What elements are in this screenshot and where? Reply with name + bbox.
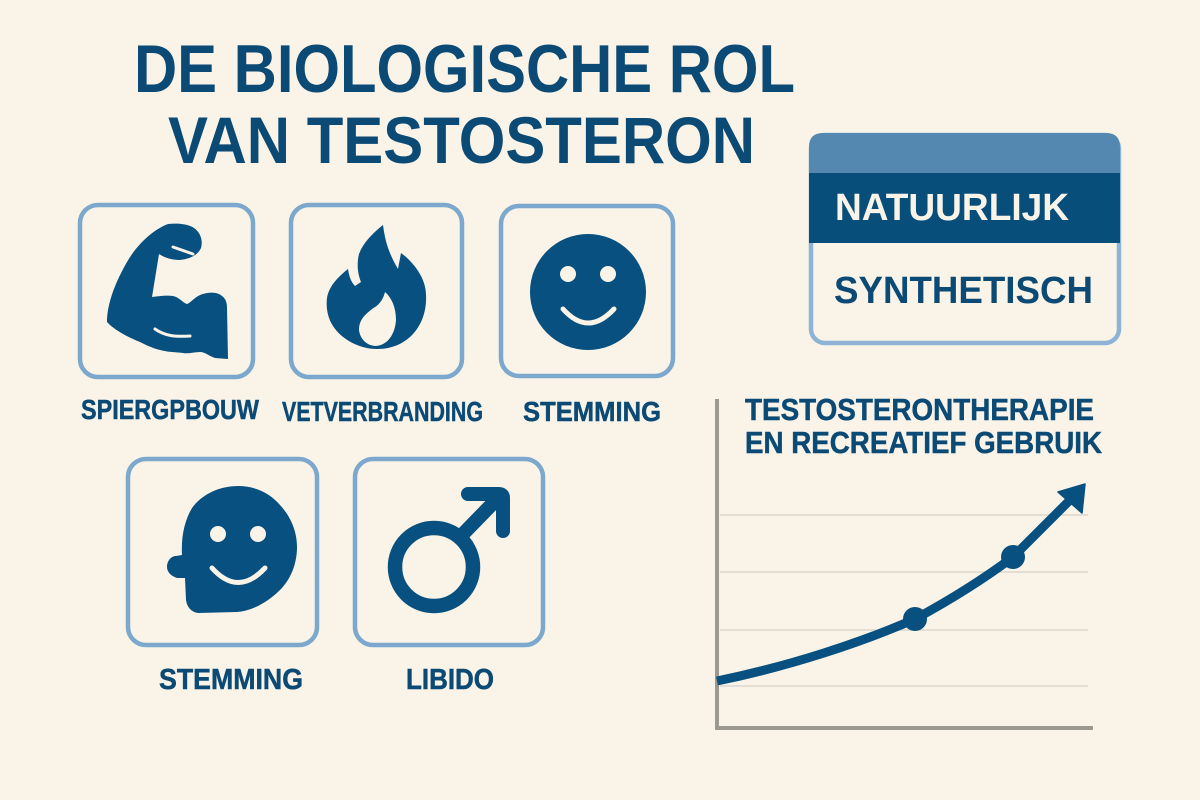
panel: line chart — [717, 392, 1103, 728]
icon: smiley — [530, 234, 646, 350]
icon frame: vetverbranding — [291, 205, 462, 377]
chart heading — [745, 392, 1103, 460]
panel: spieropbouw — [80, 205, 259, 425]
panel: vetverbranding — [282, 205, 483, 427]
panel: stemming 2 — [128, 459, 317, 696]
panel: stemming 1 — [501, 206, 673, 427]
chart heading: TESTOSTERONTHERAPIE — [745, 392, 1094, 427]
icon: male symbol — [395, 494, 503, 606]
header band — [809, 133, 1120, 173]
title: DE BIOLOGISCHE ROL — [134, 31, 795, 107]
icon: flexed muscle — [107, 224, 228, 359]
option: natuurlijk: NATUURLIJK — [835, 187, 1070, 229]
title: VAN TESTOSTERON — [168, 103, 755, 177]
panel: libido — [355, 459, 543, 696]
icon frame: spieropbouw — [80, 205, 253, 377]
label: libido: LIBIDO — [406, 664, 494, 696]
label: stemming 2: STEMMING — [159, 664, 303, 696]
icon frame: stemming 1 — [501, 206, 673, 376]
icon frame: stemming 2 — [128, 459, 317, 645]
chart axes — [717, 399, 1093, 728]
label: vetverbranding: VETVERBRANDING — [282, 396, 483, 427]
icon: flame — [327, 225, 426, 349]
panel: natuurlijk / synthetisch — [809, 133, 1120, 343]
icon frame: libido — [355, 459, 543, 645]
label: spiergpbouw: SPIERGPBOUW — [81, 394, 259, 425]
icon: head with smile — [167, 486, 297, 613]
rising curve with arrow — [717, 484, 1085, 681]
card outline — [811, 135, 1119, 343]
title — [134, 31, 795, 177]
label: stemming 1: STEMMING — [523, 396, 661, 427]
option: synthetisch: SYNTHETISCH — [834, 270, 1093, 312]
option: natuurlijk — [809, 173, 1120, 243]
chart heading: EN RECREATIEF GEBRUIK — [745, 425, 1103, 460]
